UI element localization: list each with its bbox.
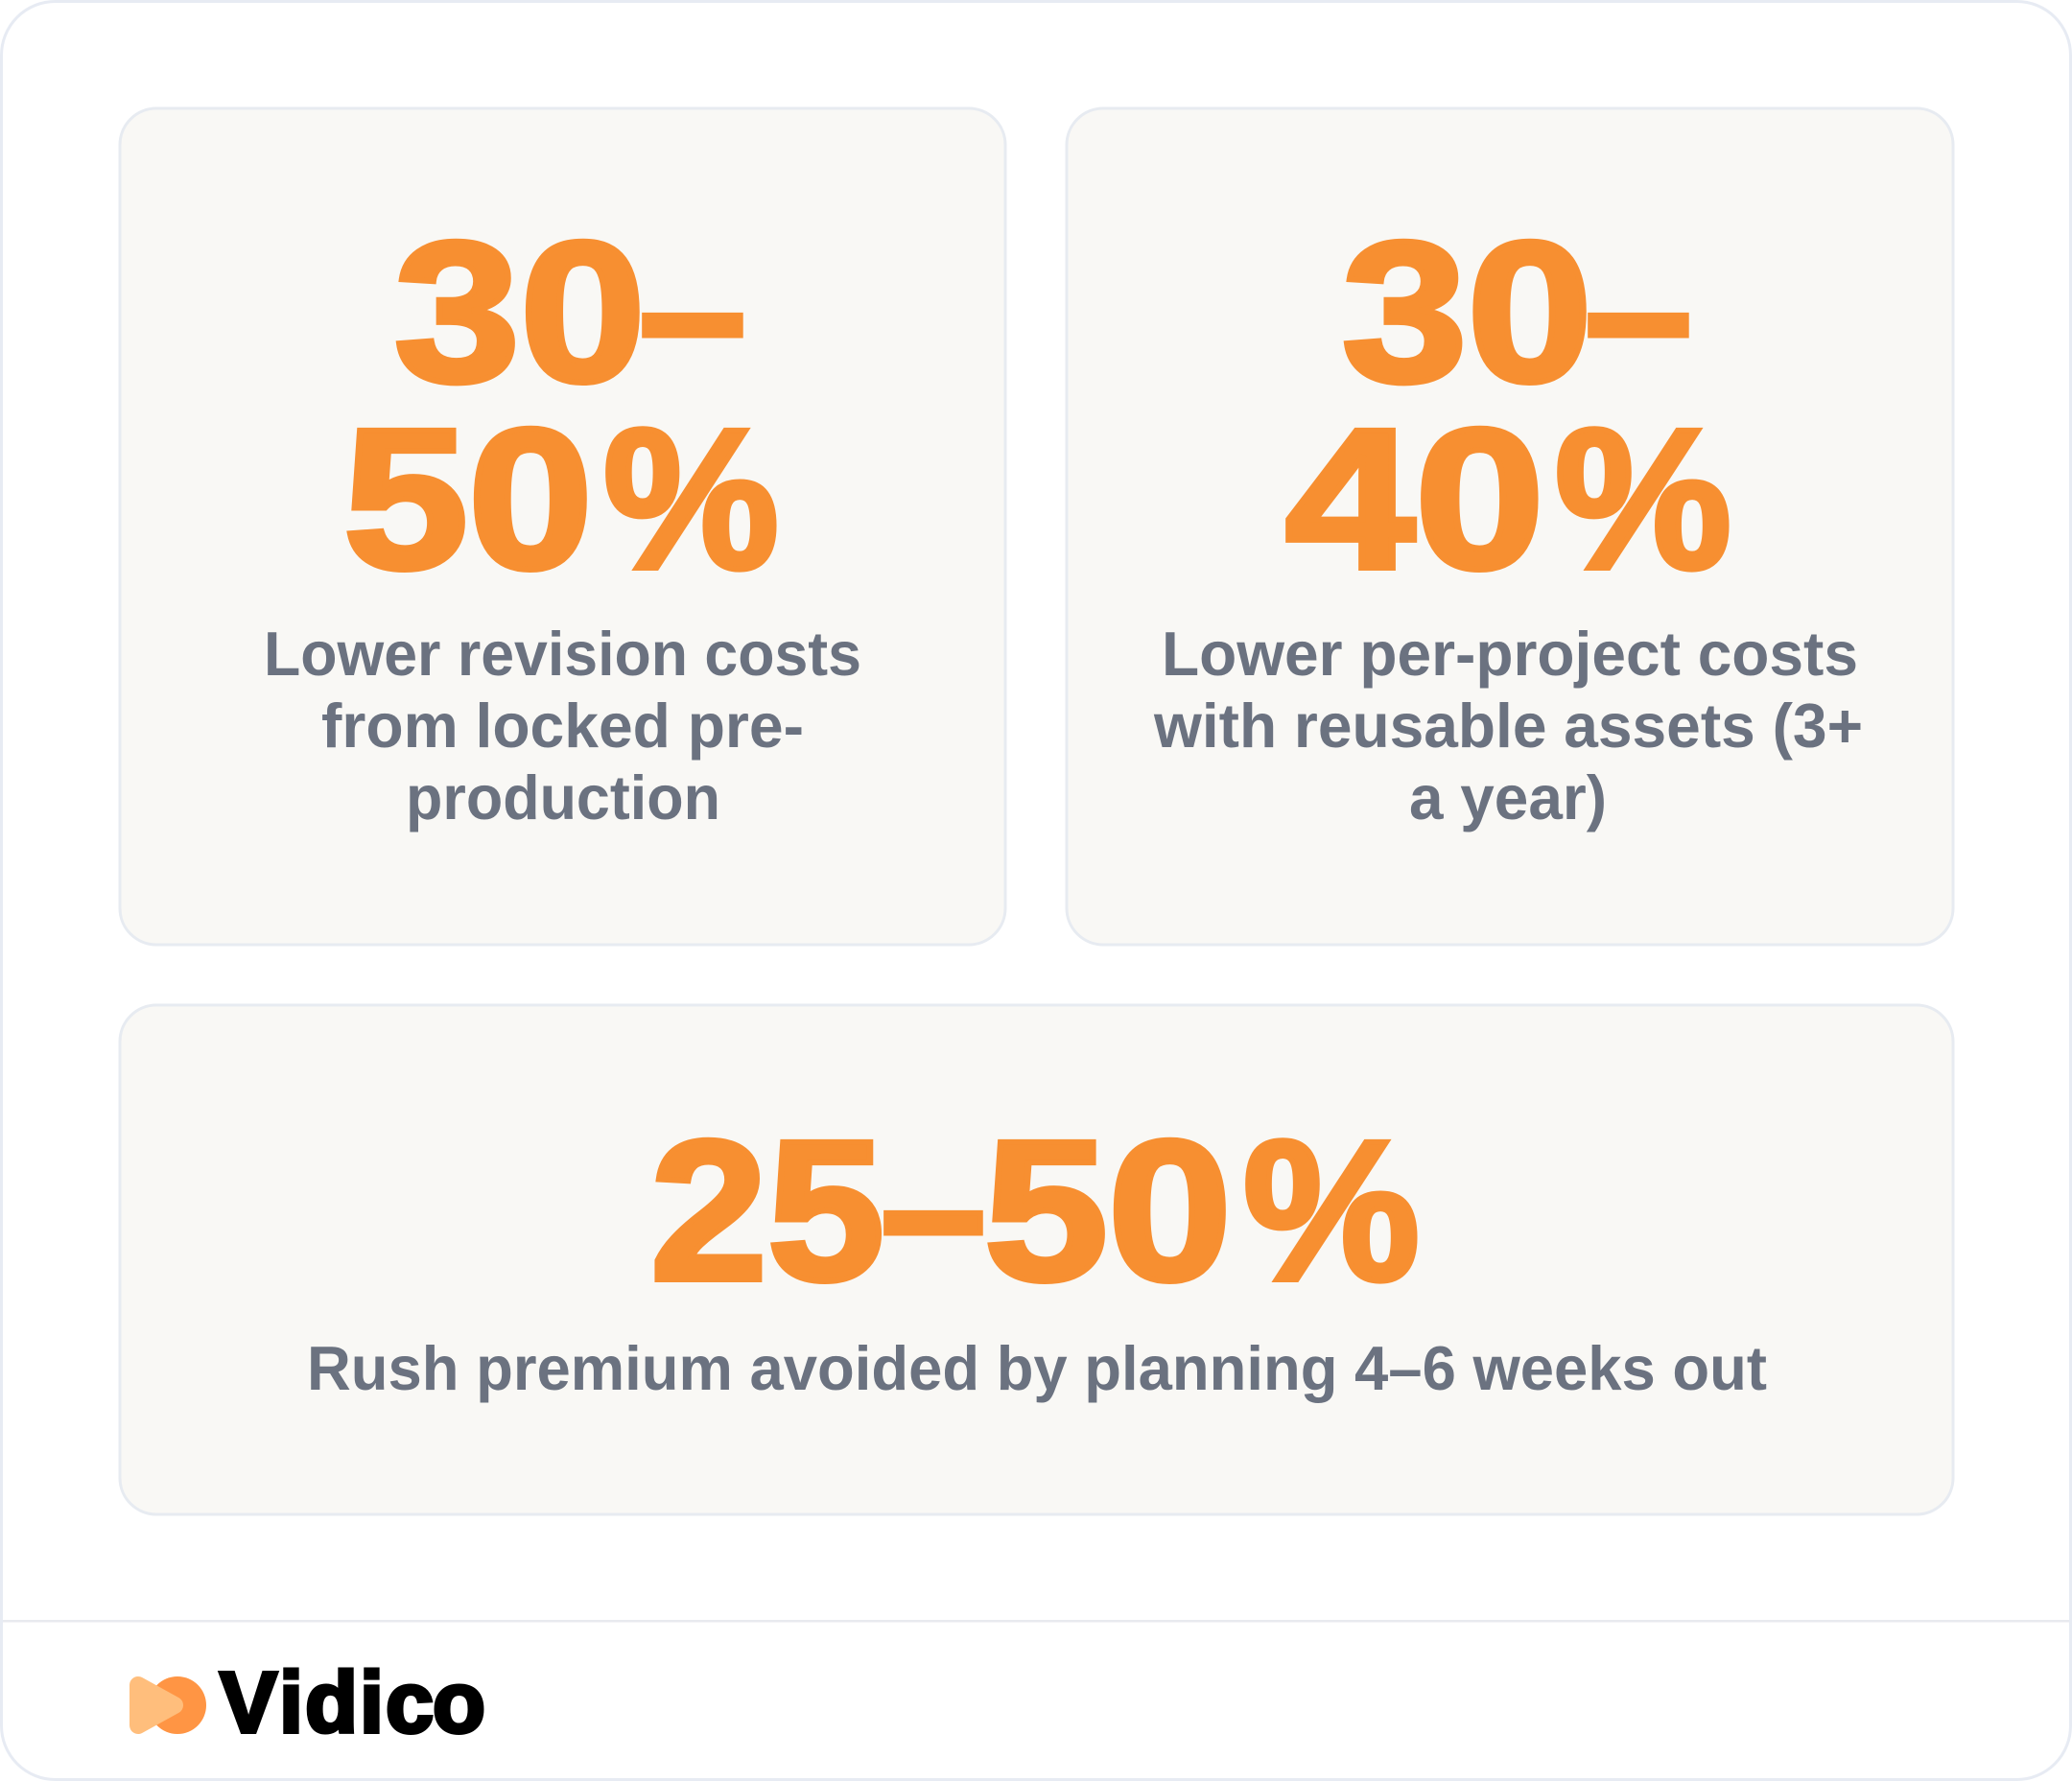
description: revision costs: production [406,762,720,832]
stat: 30–50%: – [639,199,746,422]
panel: per-project costs [1067,108,1953,945]
stat: 25–50%: % [1243,1100,1420,1323]
description: revision costs [264,619,861,832]
stat: 30–40%: – [1585,199,1692,422]
stat: 30–40%: % [1555,388,1731,611]
stat: 25–50%: 25 [650,1100,884,1323]
stat: 30–50%: % [603,388,779,611]
stat: 30–40%: 40 [1285,388,1544,611]
stat: 25–50%: 50 [984,1100,1232,1323]
stat: 25–50% [650,1097,1420,1323]
stat: 25–50%: – [881,1097,986,1320]
description: per-project costs: a year) [1409,762,1607,832]
stat: 30–50%: 30 [394,201,646,424]
description: rush premium: Rush premium avoided by planning 4–6 weeks out [307,1333,1767,1403]
description: per-project costs: Lower per-project costs [1162,619,1858,689]
description: revision costs: Lower revision costs [264,619,861,689]
icon: play mark [138,1676,206,1734]
stat: 30–40%: 30 [1342,201,1592,424]
description: revision costs: from locked pre- [321,691,804,761]
description: per-project costs: with reusable assets (3+ [1153,691,1863,761]
panel: revision costs [120,108,1005,945]
stat: 30–50%: 50 [343,388,593,611]
stat: 30–40% [1285,199,1731,611]
wordmark: Vidico [220,1655,485,1751]
stat: 30–50% [343,199,779,611]
logo: Vidico [138,1655,485,1751]
panel: rush premium [120,1005,1953,1514]
description: per-project costs [1153,619,1863,832]
